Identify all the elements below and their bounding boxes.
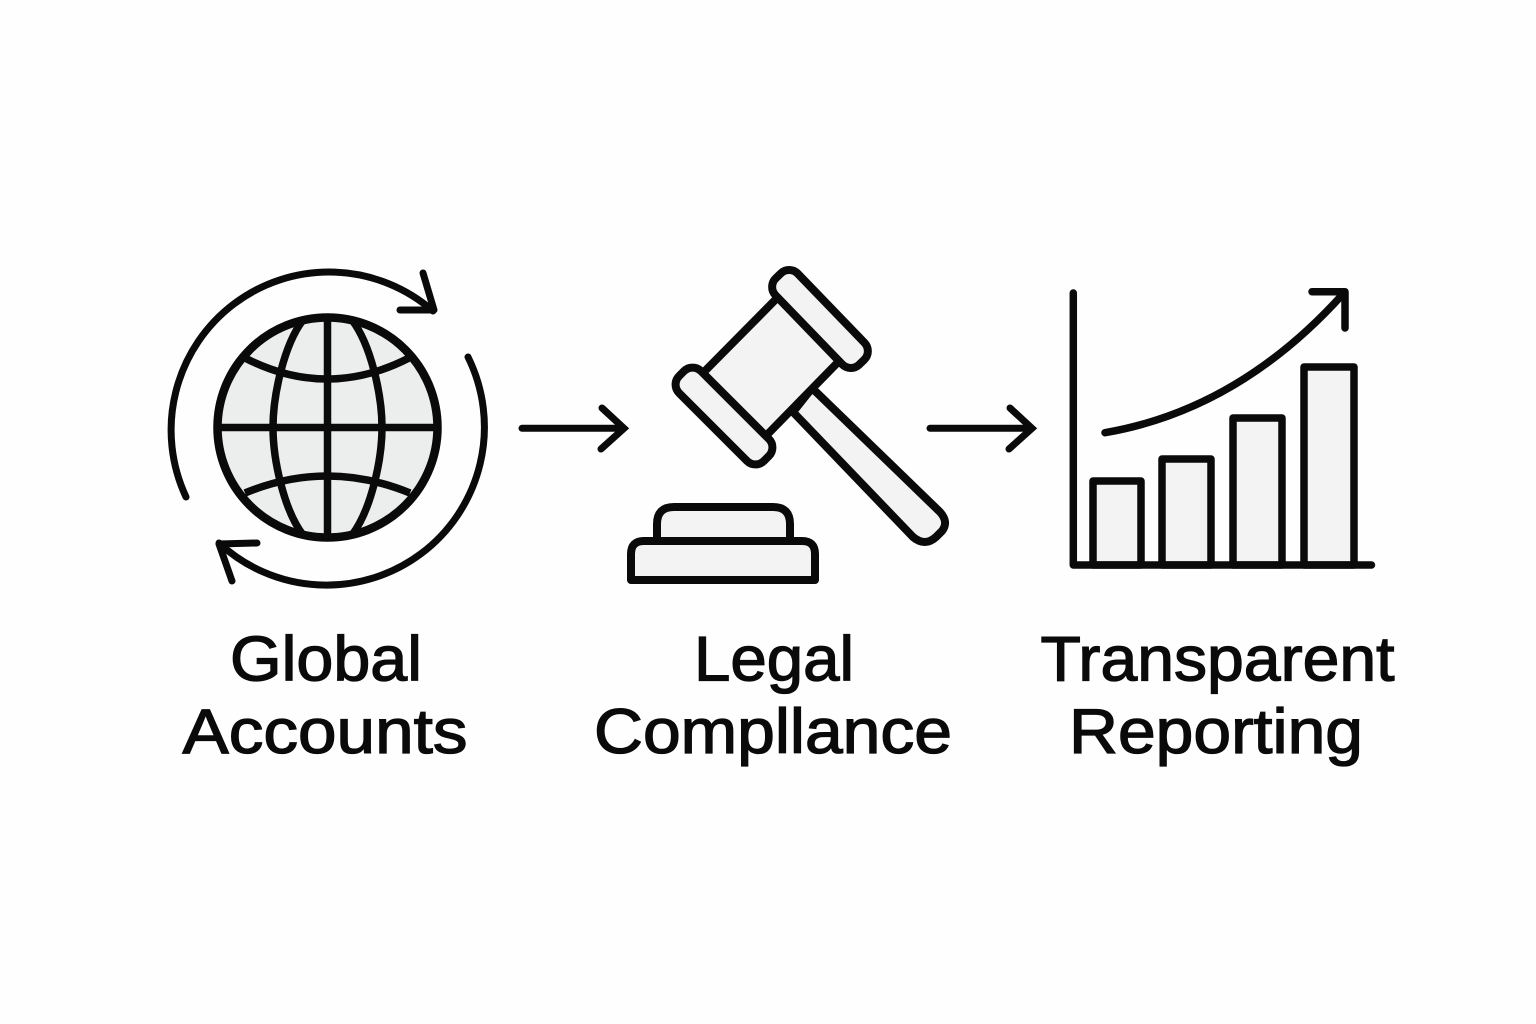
label: Transparent Reporting: Reporting xyxy=(1069,697,1363,767)
icon: bar chart with growth arrow xyxy=(1073,292,1372,565)
label: Legal Compliance: Legal xyxy=(694,624,854,694)
label: Global Accounts: Global xyxy=(230,624,422,694)
icon: gavel xyxy=(631,265,945,580)
gavel head xyxy=(698,290,845,442)
label: Transparent Reporting xyxy=(1040,624,1395,767)
gavel top bar xyxy=(767,265,873,373)
label: Legal Compliance xyxy=(594,624,952,767)
label: Global Accounts: Accounts xyxy=(182,697,468,767)
sound block base xyxy=(631,541,815,580)
gavel handle xyxy=(793,388,945,542)
label: Global Accounts xyxy=(182,624,468,767)
sound block xyxy=(657,507,790,541)
arrow: accounts to compliance xyxy=(522,408,624,449)
label: Legal Compliance: Compllance xyxy=(594,697,952,767)
icon: globe with rotating arrows xyxy=(171,272,484,585)
gavel bottom bar xyxy=(671,363,777,469)
label: Transparent Reporting: Transparent xyxy=(1040,624,1395,694)
arrow: compliance to reporting xyxy=(930,408,1032,449)
